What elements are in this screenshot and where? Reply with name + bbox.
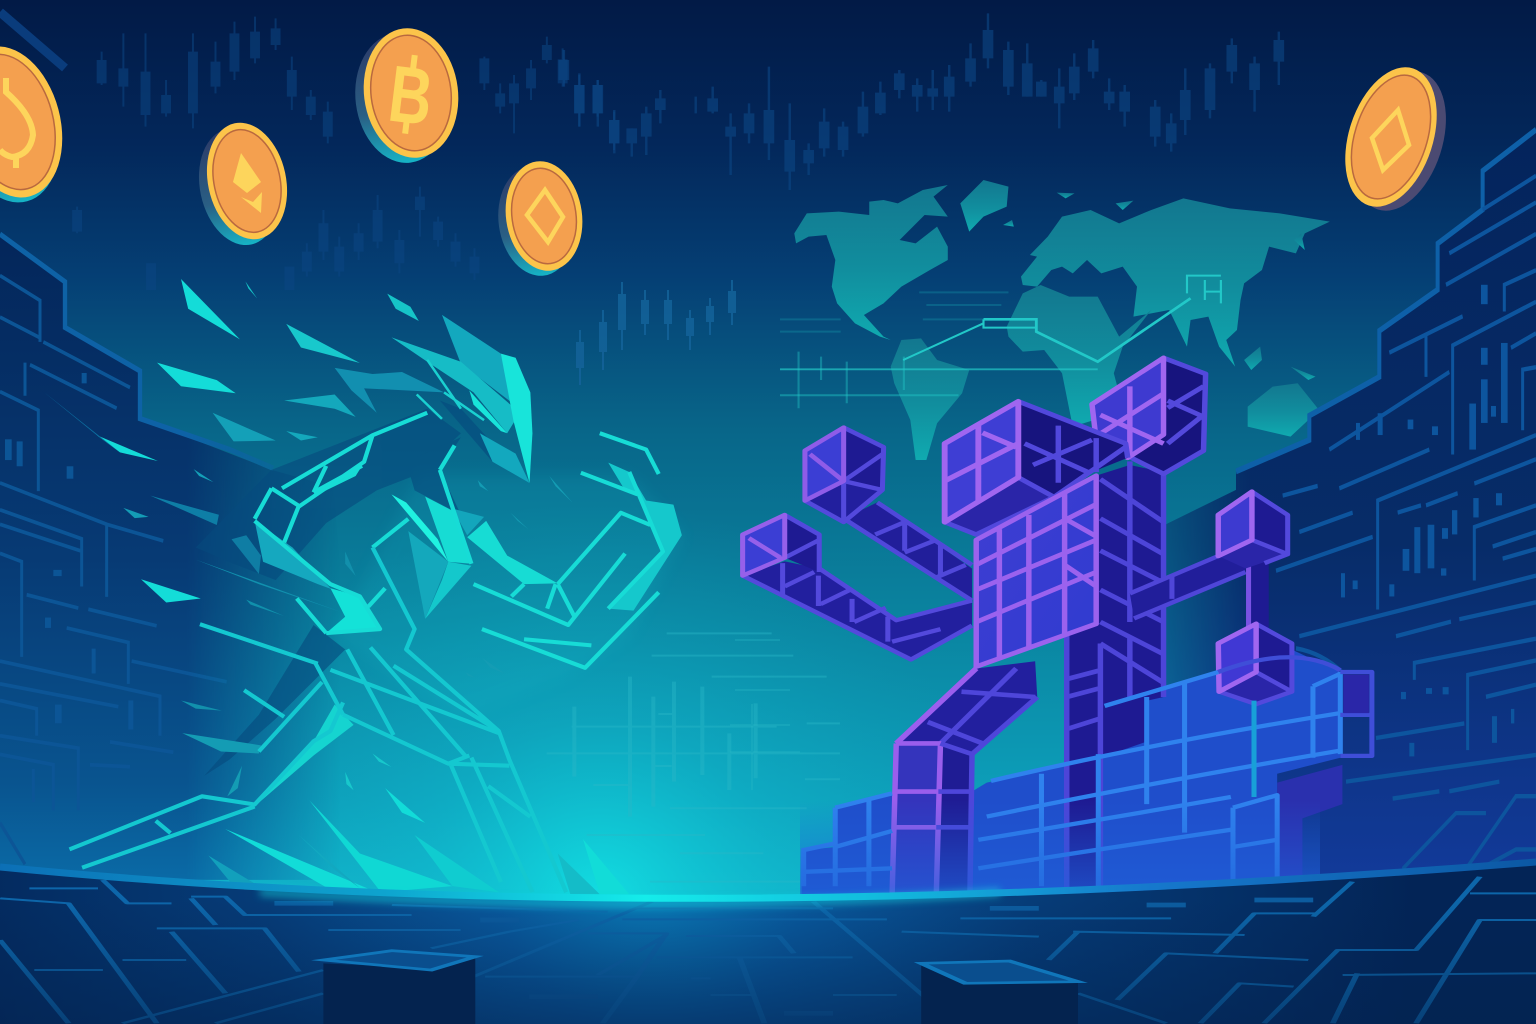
- fighter flying shards: [43, 279, 572, 796]
- wall outline: [0, 234, 273, 468]
- faint grid chart centre: [547, 633, 840, 882]
- right circuit wall: [1165, 130, 1536, 880]
- robot: right lower cube: [1218, 624, 1292, 704]
- base: fill: [802, 651, 1340, 897]
- fighter dark silhouette: [196, 401, 528, 776]
- cyan fighter: crystalline figure: [43, 279, 684, 894]
- world map: [780, 180, 1330, 460]
- base: right dark panel: [1343, 675, 1369, 713]
- robot: torso: [976, 476, 1096, 667]
- map: route lines: [780, 276, 1221, 408]
- wall small blocks: [1341, 285, 1514, 756]
- left circuit wall: [0, 232, 325, 880]
- robot: lower left arm and fist: [743, 515, 972, 660]
- floor: [0, 862, 1536, 1024]
- coin: left, cut off: [0, 35, 79, 214]
- candlestick chart backdrop, centre and right: [564, 13, 1279, 190]
- floor block left: [323, 951, 475, 1024]
- coin: bitcoin: B: [384, 48, 438, 142]
- fighter glow: [335, 474, 684, 719]
- robot: right body column: [1067, 461, 1164, 897]
- coin: bitcoin: [347, 23, 466, 168]
- floor horizon glow: [260, 892, 1000, 904]
- fighter bottom shards: [208, 788, 629, 894]
- candlestick chart backdrop, left: [77, 17, 614, 290]
- fighter outlines lower: [69, 547, 566, 892]
- robot: main head cube: [945, 401, 1128, 535]
- robot: upper left arm and fist: [805, 427, 972, 601]
- base: grid lines: [802, 657, 1372, 886]
- candlesticks above centre grid: [580, 280, 732, 385]
- top left corner bar: [0, 12, 65, 68]
- floor circuit lines: [0, 877, 1536, 1023]
- faint grid lines under map: [730, 640, 800, 790]
- coin: ethereum: [188, 115, 298, 253]
- base: lower right dark block: [1277, 765, 1342, 897]
- blue block base and purple robot: [743, 358, 1372, 897]
- wall circuit lines: [0, 276, 227, 864]
- fighter shoulder and arm facets: [196, 463, 682, 804]
- fighter hair shards: [284, 315, 532, 483]
- wall circuit lines: [1276, 176, 1536, 871]
- coins: [0, 23, 1463, 281]
- floor bottom darkening: [0, 900, 1536, 1024]
- floor horizon line: [0, 862, 1536, 898]
- wall small blocks: [5, 373, 133, 729]
- robot: left leg: [892, 661, 1037, 897]
- map: continents: [794, 180, 1330, 460]
- wall outline: [1236, 130, 1536, 471]
- coin: diamond right: [1328, 56, 1463, 222]
- robot: back head cube: [1092, 358, 1206, 474]
- base fade toward floor: [800, 800, 1320, 900]
- robot: right arm and link column: [1130, 551, 1269, 629]
- fighter outlines upper: [255, 413, 663, 668]
- coin: diamond centre: [491, 156, 590, 281]
- robot: right upper cube fist: [1218, 492, 1288, 568]
- floor block right: [921, 961, 1078, 1024]
